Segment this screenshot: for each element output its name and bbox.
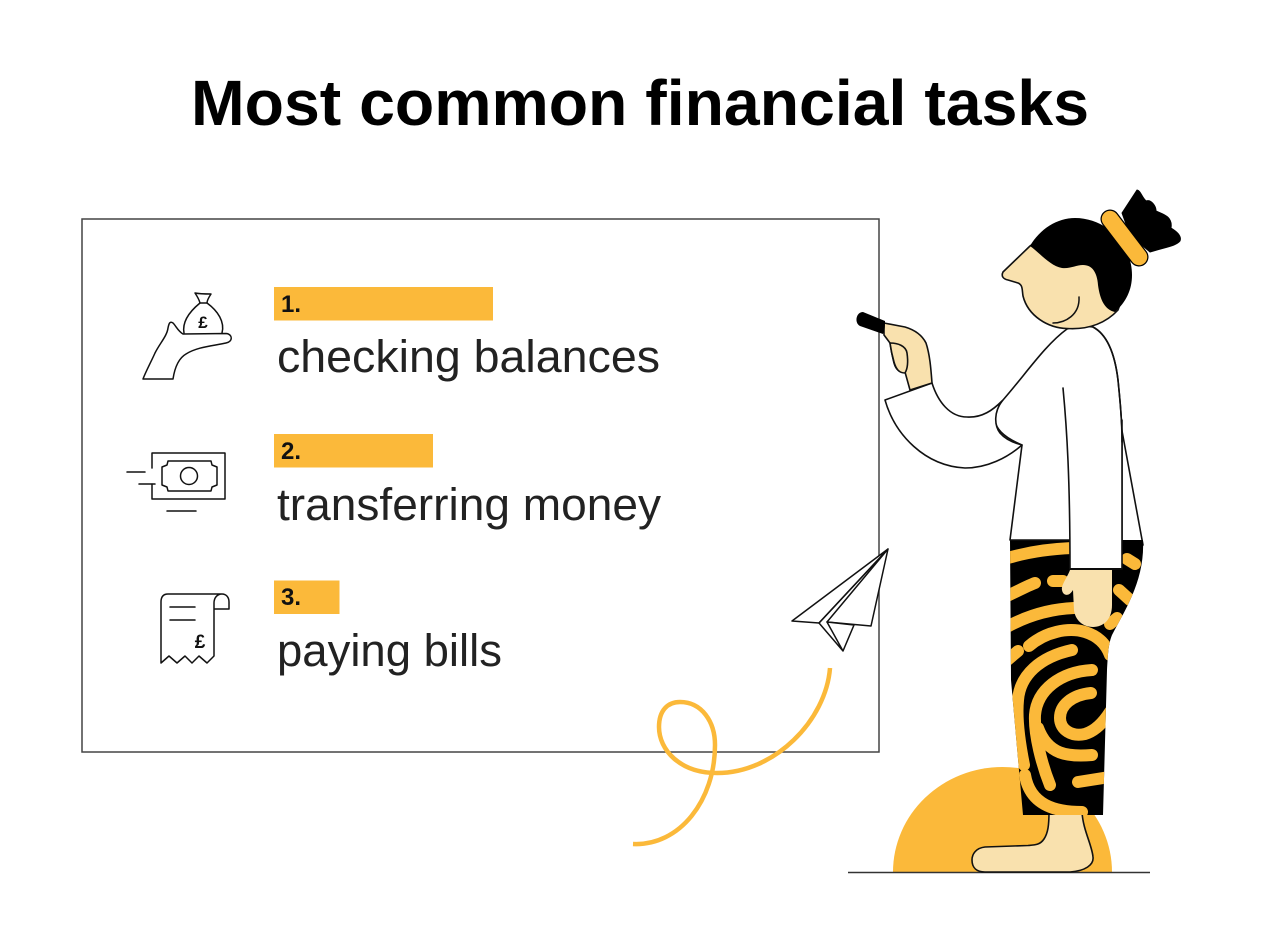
- topknot: [1122, 190, 1180, 252]
- icon: flying banknote: [127, 453, 225, 511]
- label bar 1: 1.: [281, 291, 301, 318]
- text: transferring money: transferring money: [277, 479, 662, 530]
- task 2: transferring money: [127, 434, 662, 530]
- white blouse: [995, 326, 1122, 540]
- text: paying bills: paying bills: [277, 625, 502, 676]
- label bar 3: 3.: [281, 584, 301, 611]
- raised arm sleeve: [885, 383, 1022, 468]
- marker: [856, 312, 885, 334]
- back lower torso: [1120, 420, 1143, 545]
- lower hand: [1062, 570, 1112, 627]
- label bar 3: [274, 580, 340, 614]
- illustration: woman drawing on the board: [856, 190, 1180, 872]
- label bar 2: [274, 434, 433, 468]
- icon: paper plane: [792, 549, 888, 651]
- hair band: [1110, 219, 1139, 257]
- sleeve outline: [1063, 388, 1122, 569]
- label bar 1: [274, 287, 493, 320]
- shoulder line: [1093, 327, 1122, 442]
- task 1: checking balances: [143, 287, 660, 382]
- head: [1002, 235, 1125, 329]
- icon: receipt: [161, 594, 229, 663]
- panel: task list frame: [82, 219, 879, 752]
- label bar 2: 2.: [281, 438, 301, 465]
- icon: hand holding money bag: [143, 293, 231, 379]
- trousers: [1005, 540, 1143, 815]
- loop trail: [633, 668, 830, 844]
- hair: [1030, 218, 1132, 312]
- sun semicircle: [893, 767, 1112, 872]
- tucked arm sleeve: [1063, 388, 1122, 568]
- thumb: [890, 343, 908, 373]
- ground line: [848, 872, 1150, 874]
- task 3: paying bills: [161, 580, 502, 676]
- text: checking balances: checking balances: [277, 331, 660, 382]
- icon: receipt: £: [195, 632, 206, 653]
- icon: hand holding money bag: £: [198, 313, 208, 332]
- smile: [1053, 297, 1079, 323]
- title: Most common financial tasks: [191, 67, 1089, 139]
- raised hand: [884, 323, 932, 390]
- foot: [972, 812, 1093, 872]
